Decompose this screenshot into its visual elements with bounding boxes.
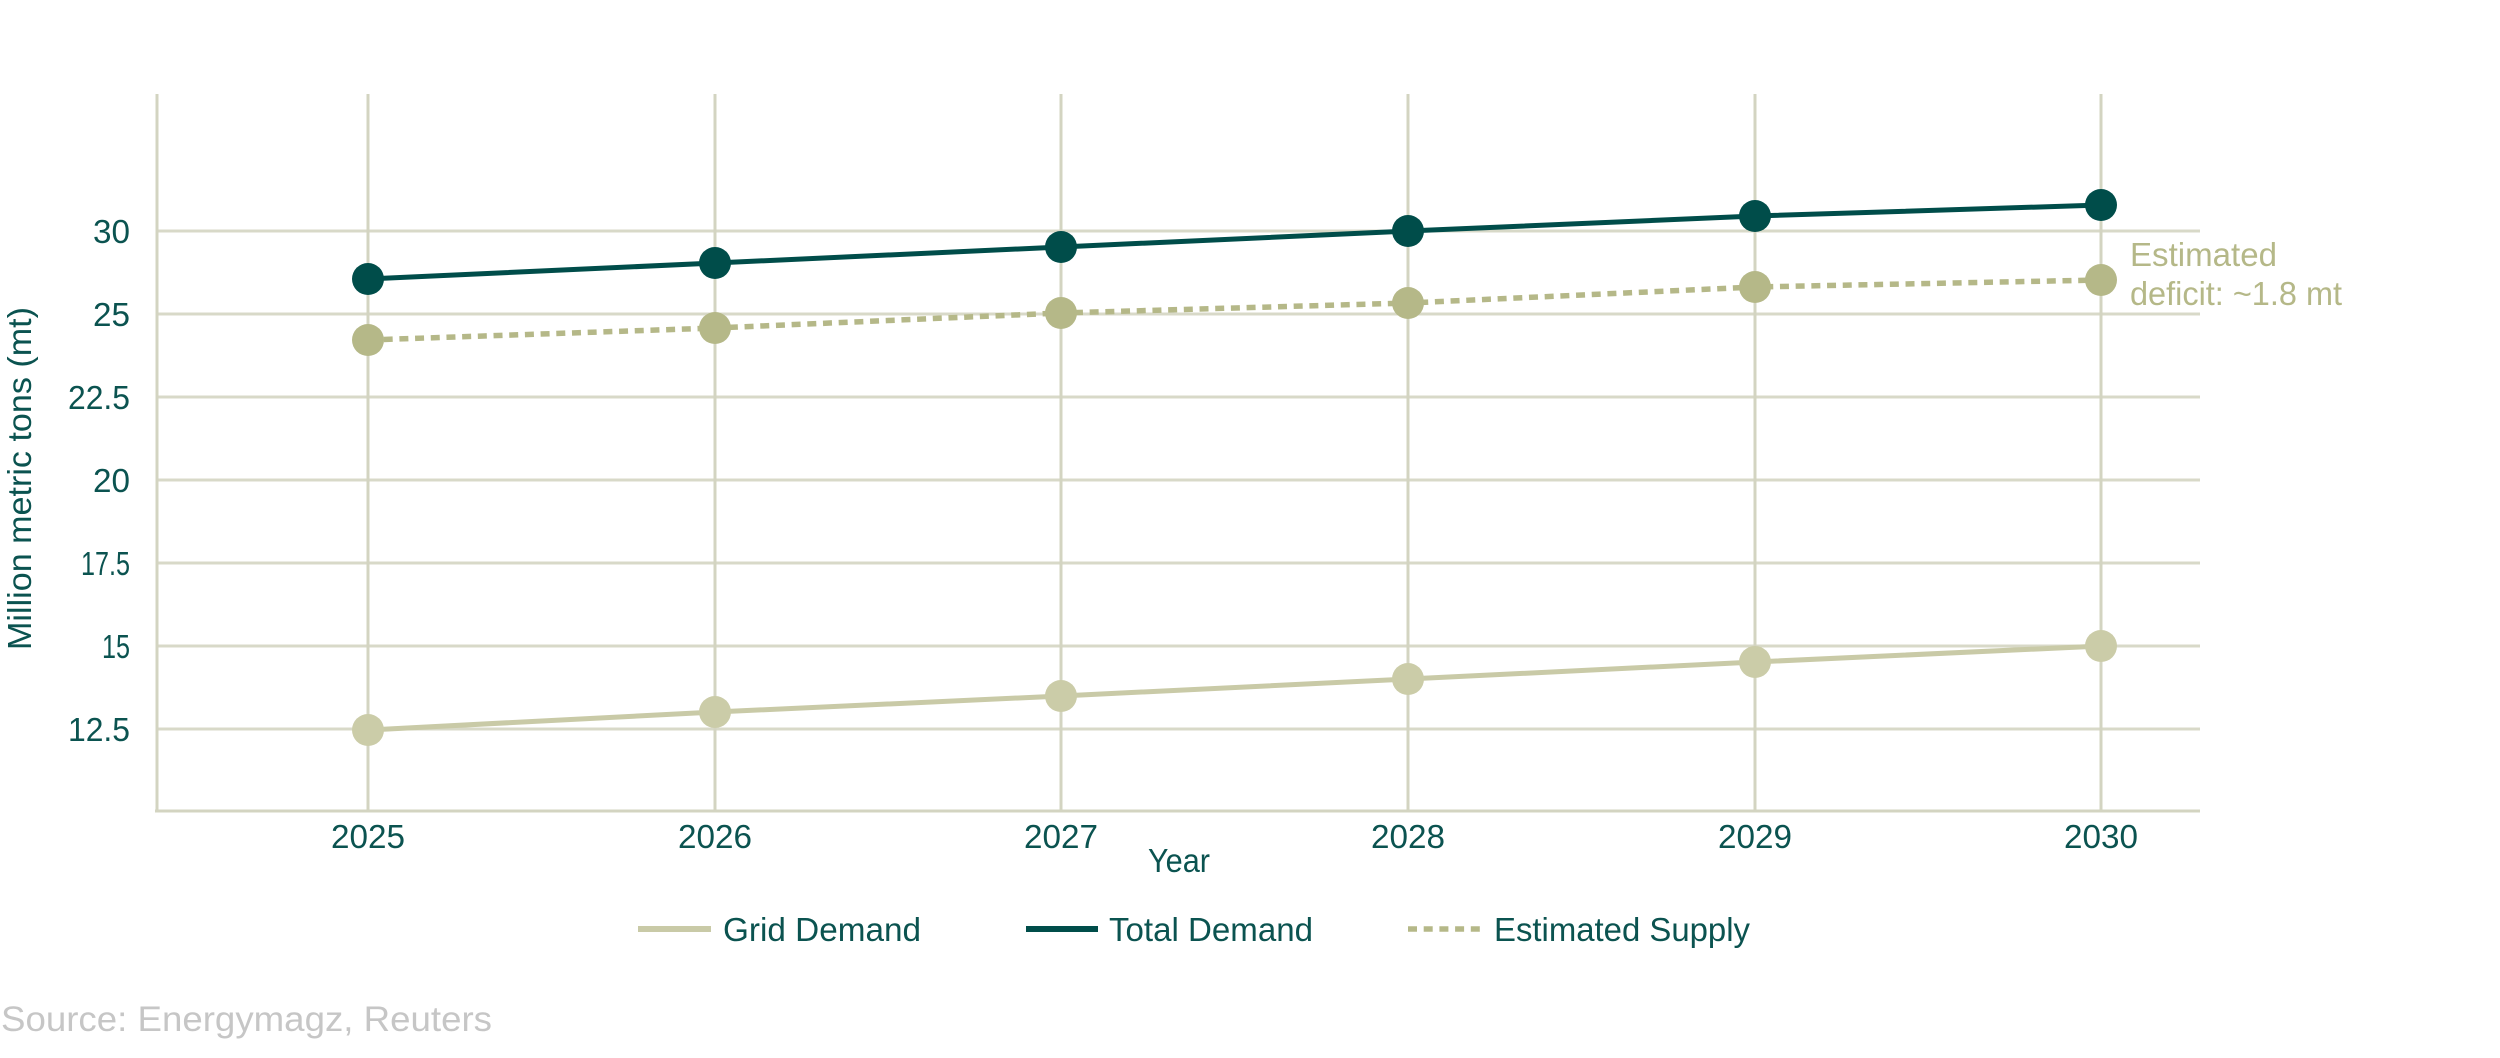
x axis title: Year [1148, 842, 1210, 879]
y axis labels: 25 [93, 296, 130, 333]
series: total demand [352, 189, 2117, 295]
annotation: estimated deficit [2130, 236, 2342, 312]
x axis labels: 2025 [331, 818, 405, 855]
y axis labels: 12.5 [68, 711, 130, 748]
legend: grid demand: Grid Demand [723, 911, 921, 948]
annotation: estimated deficit: deficit: ~1.8 mt [2130, 275, 2342, 312]
x axis labels [331, 818, 2138, 855]
series: grid demand [352, 630, 2117, 746]
y axis labels: 17.5 [81, 545, 130, 582]
legend: grid demand [638, 911, 921, 948]
x axis labels: 2027 [1024, 818, 1098, 855]
x axis labels: 2029 [1718, 818, 1792, 855]
series: estimated supply [352, 264, 2117, 356]
annotation: estimated deficit: Estimated [2130, 236, 2277, 273]
y axis labels: 30 [93, 213, 130, 250]
y axis title: Million metric tons (mt) [1, 307, 38, 650]
y axis labels: 22.5 [68, 379, 130, 416]
y axis labels: 20 [93, 462, 130, 499]
y axis labels [68, 213, 130, 748]
x axis labels: 2030 [2064, 818, 2138, 855]
source note: Source: Energymagz, Reuters [1, 1000, 492, 1039]
y axis labels: 15 [102, 628, 130, 665]
x axis labels: 2028 [1371, 818, 1445, 855]
x axis labels: 2026 [678, 818, 752, 855]
legend [638, 911, 1750, 948]
legend: total demand: Total Demand [1109, 911, 1313, 948]
legend: estimated supply: Estimated Supply [1494, 911, 1750, 948]
